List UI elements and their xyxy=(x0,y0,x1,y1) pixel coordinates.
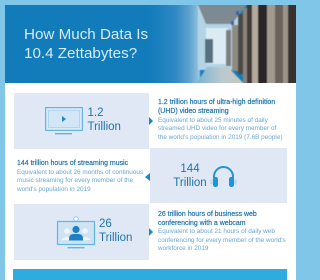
stat: 26 Trillion xyxy=(99,218,132,244)
text: web conferencing xyxy=(158,210,286,252)
icon: webcam monitor xyxy=(56,216,96,248)
description: Equivalent to about 21 hours of daily web xyxy=(158,228,275,235)
bottom bar xyxy=(13,269,287,280)
heading xyxy=(158,210,257,227)
icon: monitor with play xyxy=(45,107,83,134)
stat: 144 Trillion xyxy=(173,163,207,188)
description: world's population in 2019 xyxy=(17,186,91,193)
title xyxy=(24,26,148,62)
stat: 1.2 Trillion: Trillion xyxy=(88,120,121,132)
icon: headphones xyxy=(210,166,236,187)
heading: 26 trillion hours of business web xyxy=(158,211,257,218)
heading: 1.2 trillion hours of ultra-high definition xyxy=(158,99,275,106)
title: 10.4 Zettabytes? xyxy=(24,44,137,62)
description: Equivalent to about 25 minutes of daily xyxy=(158,117,268,124)
stat: 26 Trillion: 26 xyxy=(99,218,112,230)
description: Equivalent to about 26 months of continuous xyxy=(17,169,143,176)
header photo: data centre corridor xyxy=(156,5,296,83)
stat: 26 Trillion: Trillion xyxy=(99,232,132,244)
heading: (UHD) video streaming xyxy=(158,108,229,115)
description xyxy=(17,169,143,193)
heading: conferencing with a webcam xyxy=(158,220,246,227)
description: the world's population in 2019 (7.6B people) xyxy=(158,134,283,141)
text: video streaming xyxy=(158,98,283,141)
text: streaming music xyxy=(17,159,143,193)
description xyxy=(158,228,286,252)
heading xyxy=(158,98,275,115)
panel: web conferencing stat xyxy=(14,204,149,260)
stat: 1.2 Trillion xyxy=(88,107,121,132)
description xyxy=(158,117,283,141)
description: streamed UHD video for every member of xyxy=(158,125,276,132)
panel: streaming music stat xyxy=(150,148,287,203)
heading: 144 trillion hours of streaming music xyxy=(17,160,128,167)
arrow xyxy=(149,228,153,236)
description: workforce in 2019 xyxy=(158,245,208,252)
arrow xyxy=(145,173,150,181)
stat: 144 Trillion: 144 xyxy=(180,163,200,175)
description: conferencing for every member of the world's xyxy=(158,237,286,244)
stat: 1.2 Trillion: 1.2 xyxy=(88,107,104,119)
header banner xyxy=(5,5,296,83)
title: How Much Data Is xyxy=(24,26,148,43)
arrow xyxy=(149,117,153,125)
panel: video streaming stat xyxy=(14,93,149,149)
description: music streaming for every member of the xyxy=(17,177,133,184)
stat: 144 Trillion: Trillion xyxy=(173,176,207,188)
